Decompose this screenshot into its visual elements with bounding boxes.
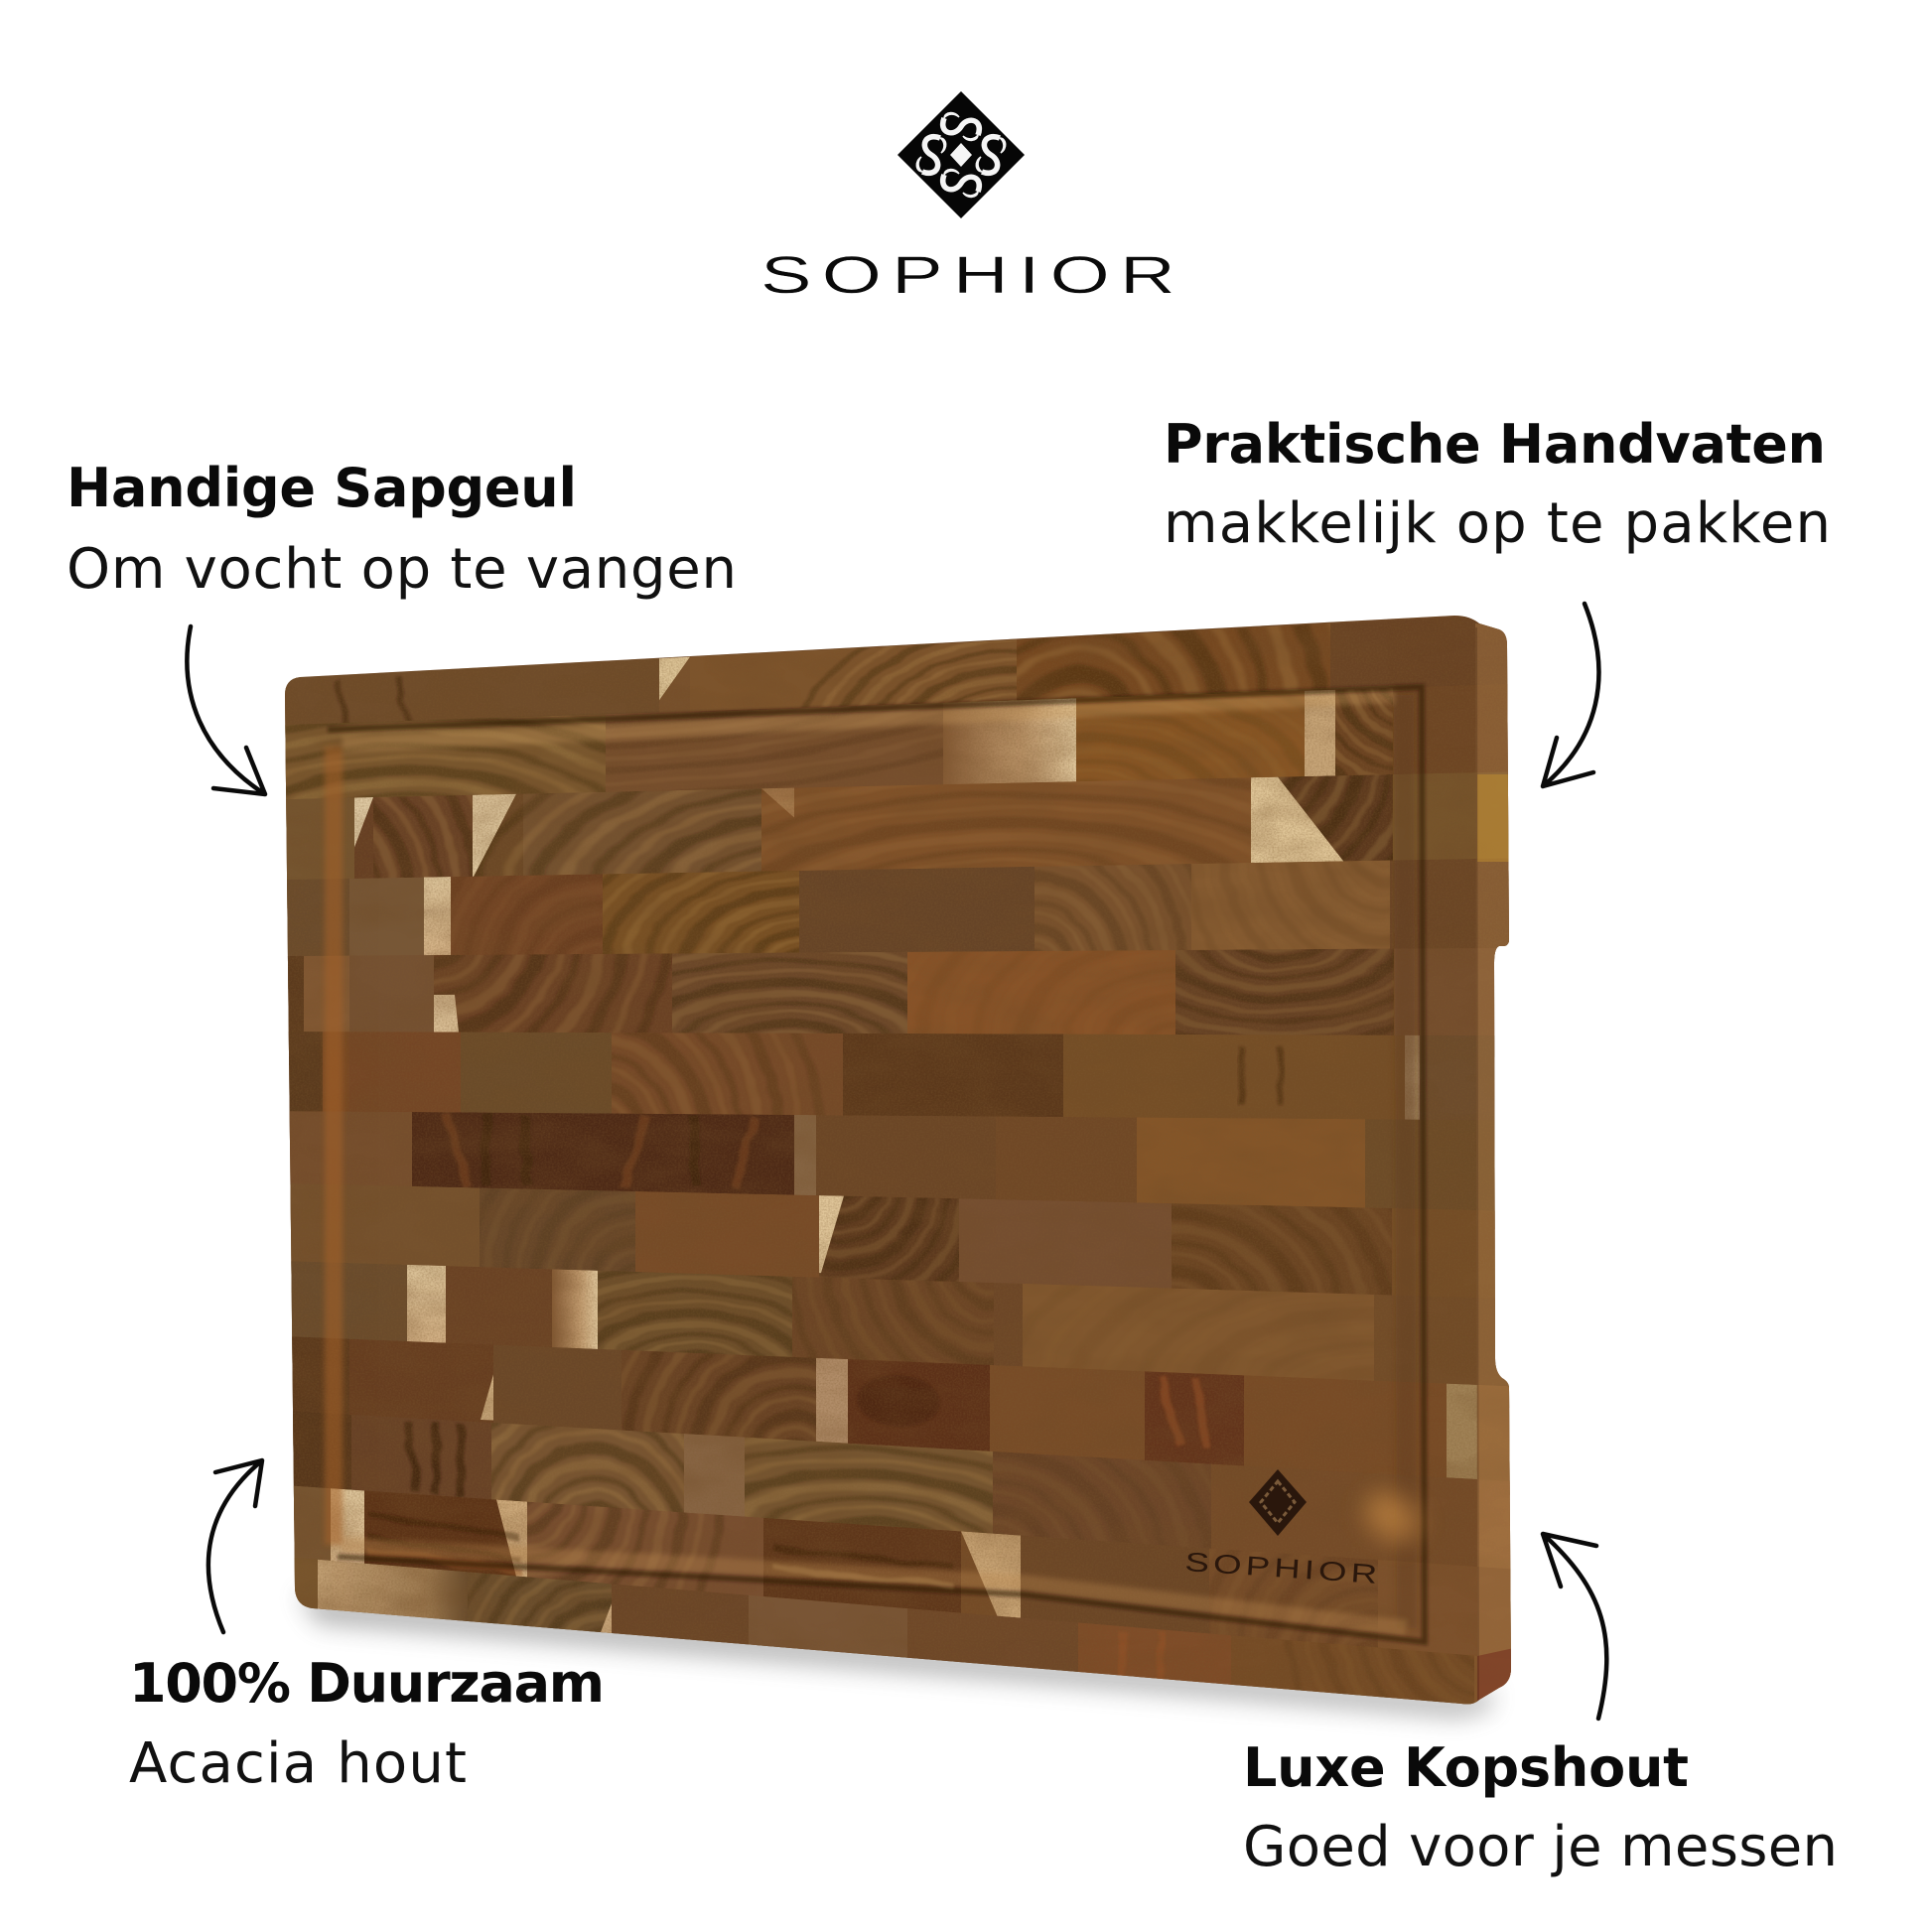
- wood row 6: [288, 1032, 1495, 1140]
- callout: Handige Sapgeul: Handige Sapgeul: [67, 457, 577, 519]
- overlay: low frequency wood tone: [318, 616, 1477, 1632]
- callout: Praktische Handvaten: [1164, 413, 1831, 556]
- callout: Luxe Kopshout: [1243, 1736, 1838, 1879]
- wood row 3: [286, 772, 1509, 908]
- icon: engraved diamond: [1249, 1469, 1307, 1536]
- side glow: [1355, 1482, 1429, 1552]
- wood row 11: [293, 1415, 1511, 1575]
- wood row 10: [292, 1336, 1510, 1495]
- wood row 9: [291, 1261, 1509, 1408]
- arrow: to end grain: [1543, 1534, 1606, 1719]
- wood row 1: [285, 616, 1507, 782]
- cutting board: [285, 616, 1511, 1704]
- icon: ornament diamond: [897, 91, 1025, 218]
- callout: Praktische Handvaten: makkelijk op te pakken: [1164, 491, 1831, 556]
- callout: Handige Sapgeul: [67, 457, 737, 602]
- overlay: end grain texture: [290, 616, 1477, 1633]
- overlay: overall tone: [318, 657, 1343, 1632]
- callout: Handige Sapgeul: Om vocht op te vangen: [67, 537, 737, 602]
- arrow: to handles: [1543, 604, 1598, 786]
- board side edge: [1475, 623, 1511, 1702]
- callout: 100% Duurzaam: Acacia hout: [129, 1731, 467, 1796]
- arrow: to acacia wood: [208, 1460, 262, 1632]
- callout: Praktische Handvaten: Praktische Handvaten: [1164, 413, 1826, 476]
- wood row 13: [294, 1558, 1511, 1704]
- brand logo: [760, 91, 1185, 305]
- wordmark: SOPHIOR: [760, 246, 1185, 305]
- engraved logo: [1184, 1469, 1382, 1589]
- wood row 4: [287, 859, 1509, 989]
- wood row 5: [288, 948, 1497, 1065]
- arrow: to juice groove: [187, 626, 265, 794]
- callout: Luxe Kopshout: Goed voor je messen: [1243, 1815, 1838, 1879]
- juice groove: [328, 687, 1425, 1642]
- wood row 12: [294, 1485, 1511, 1677]
- engraved wordmark: SOPHIOR: [1184, 1547, 1382, 1589]
- callout: 100% Duurzaam: 100% Duurzaam: [129, 1652, 605, 1715]
- callout: Luxe Kopshout: Luxe Kopshout: [1243, 1736, 1689, 1799]
- callout: 100% Duurzaam: [129, 1652, 605, 1796]
- wood row 7: [278, 1111, 1519, 1229]
- board shadow: [298, 1593, 1494, 1718]
- wood row 2: [285, 684, 1508, 828]
- wood row 8: [290, 1183, 1495, 1309]
